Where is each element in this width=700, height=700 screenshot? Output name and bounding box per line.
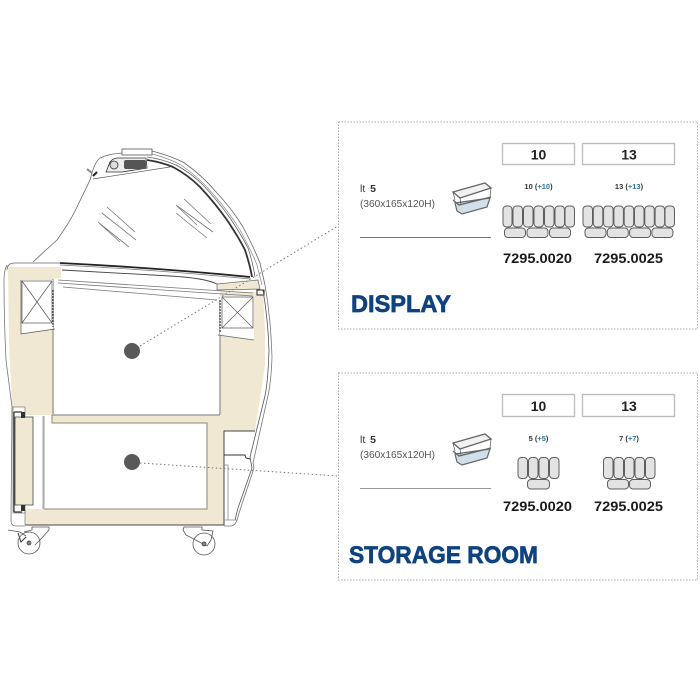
storage door <box>13 407 33 513</box>
column header 13 <box>582 394 674 416</box>
rear caster <box>183 527 215 555</box>
pan description: lt 5 <box>360 434 376 446</box>
front caster <box>8 527 49 554</box>
left insulation box <box>21 280 55 334</box>
pan description <box>360 183 435 210</box>
marker: storage room <box>124 454 140 470</box>
column header 10: 10 <box>531 146 546 162</box>
outer casing right and left <box>4 265 272 526</box>
leader line to display panel <box>140 226 338 346</box>
heading: storage room: STORAGE ROOM <box>349 542 538 569</box>
column header 10: 10 <box>531 398 546 414</box>
right insulation box <box>218 296 254 340</box>
pan layout 13 <box>583 206 674 238</box>
curved glass and canopy <box>33 149 265 285</box>
quantity label 13: 13 (+13) <box>615 182 644 191</box>
canopy mechanism <box>87 158 147 176</box>
panel: display <box>338 122 698 329</box>
leader line to storage panel <box>140 463 338 476</box>
heading: display: DISPLAY <box>351 291 451 318</box>
divider <box>360 236 491 238</box>
pan layout 10 <box>503 206 574 238</box>
pan description: (360x165x120H) <box>360 198 435 210</box>
glass reflection marks <box>98 199 213 247</box>
column header 10 <box>502 394 574 416</box>
quantity label 10: 10 (+10) <box>524 182 553 191</box>
pan description <box>360 434 435 461</box>
column header 13: 13 <box>621 146 637 162</box>
code 7295.0025: 7295.0025 <box>594 498 663 514</box>
pan description: lt 5 <box>360 183 376 195</box>
pan layout 5 <box>518 458 559 489</box>
pan description: (360x165x120H) <box>360 449 435 461</box>
pan layout 7 <box>604 458 655 489</box>
code 7295.0020: 7295.0020 <box>503 498 572 514</box>
marker: display <box>124 343 140 359</box>
column header 10 <box>502 144 574 164</box>
column header 13: 13 <box>621 398 637 414</box>
column header 13 <box>582 144 674 164</box>
panel: storage room <box>338 373 698 580</box>
lift-up shelf <box>7 263 264 300</box>
code 7295.0020: 7295.0020 <box>503 250 572 266</box>
quantity label 5: 5 (+5) <box>529 434 549 443</box>
insulated cabinet body <box>8 267 265 525</box>
icon: stacked pans <box>453 183 491 214</box>
icon: stacked pans <box>453 434 491 465</box>
quantity label 7: 7 (+7) <box>619 434 639 443</box>
divider <box>360 488 491 490</box>
display case cross-section diagram <box>4 149 338 555</box>
code 7295.0025: 7295.0025 <box>594 250 663 266</box>
